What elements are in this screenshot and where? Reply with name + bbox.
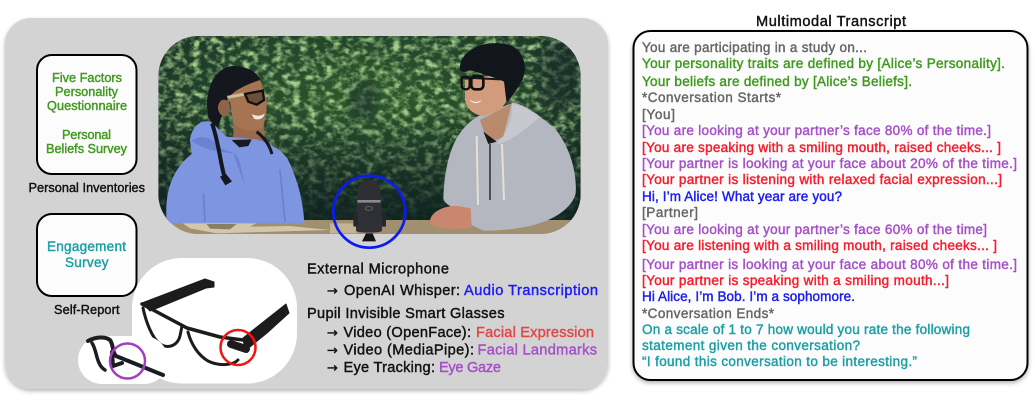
transcript: partner turn: [Your partner is looking at your face about 80% of the time.] (642, 257, 1017, 272)
transcript: your turn: [Your partner is looking at your face about 20% of the time.] (642, 156, 1017, 171)
pupil invisible smart glasses: Eye Tracking: (344, 360, 435, 376)
external microphone: External Microphone (307, 262, 449, 278)
transcript: partner turn: [You are listening with a smiling mouth, raised cheeks... ] (642, 238, 997, 253)
person: left, blue hoodie (166, 66, 304, 223)
transcript: your turn: [You are looking at your partner’s face 80% of the time.] (642, 123, 991, 138)
box: personal inventories: Questionnaire (47, 99, 127, 113)
transcript: partner turn: [Partner] (642, 205, 698, 220)
transcript: partner turn (642, 205, 1017, 304)
panel: multimodal transcript (634, 31, 1028, 380)
glasses frame (142, 279, 289, 365)
transcript: your turn (642, 107, 1017, 204)
transcript: survey question: On a scale of 1 to 7 how would you rate the following (642, 322, 970, 337)
panel: data collection (5, 18, 608, 389)
transcript: your turn: [You are speaking with a smiling mouth, raised cheeks... ] (642, 140, 1001, 155)
pupil invisible smart glasses: → (327, 344, 338, 358)
icon: microphone (353, 180, 386, 241)
transcript: survey question: “I found this conversation to be interesting.” (642, 354, 917, 369)
box: engagement survey (37, 214, 136, 296)
person: right, grey hoodie (430, 43, 576, 231)
transcript: system prompt: You are participating in a study on... (642, 40, 867, 55)
pupil invisible smart glasses: Eye Gaze (439, 360, 501, 376)
box: personal inventories: Beliefs Survey (46, 142, 128, 156)
transcript: your turn: Hi, I’m Alice! What year are you? (642, 189, 842, 204)
external microphone: Audio Transcription (464, 283, 598, 299)
transcript: your turn: [Your partner is listening with relaxed facial expression...] (642, 172, 1002, 187)
pupil invisible smart glasses (307, 306, 597, 376)
box: personal inventories: Five Factors (52, 71, 122, 85)
external microphone: OpenAI Whisper: (344, 283, 460, 299)
photo: two participants talking (158, 36, 583, 248)
transcript: survey question (642, 306, 970, 369)
pupil invisible smart glasses: → (327, 326, 338, 341)
box: personal inventories: Personal (62, 128, 111, 142)
pupil invisible smart glasses: → (327, 361, 338, 376)
heading: multimodal transcript: Multimodal Transcript (756, 14, 906, 30)
image: eye tracking close-up (78, 336, 168, 384)
external microphone (307, 262, 598, 299)
transcript: your turn: [You] (642, 107, 675, 122)
image: smart glasses (132, 258, 297, 384)
pupil invisible smart glasses: Facial Landmarks (478, 342, 597, 358)
wooden table (158, 220, 581, 234)
box: engagement survey: Survey (65, 255, 109, 270)
transcript: survey question: *Conversation Ends* (642, 306, 775, 321)
label: personal inventories: Personal Inventories (28, 181, 145, 195)
pupil invisible smart glasses: Facial Expression (476, 325, 594, 341)
box: personal inventories: Personality (55, 85, 119, 99)
pupil invisible smart glasses: Pupil Invisible Smart Glasses (307, 306, 504, 322)
transcript: partner turn: Hi Alice, I’m Bob. I’m a sophomore. (642, 289, 855, 304)
pupil invisible smart glasses: Video (OpenFace): (344, 325, 471, 341)
transcript: partner turn: [You are looking at your partner’s face 60% of the time] (642, 222, 987, 237)
marker: blue circle around microphone (333, 176, 405, 248)
hedge background (158, 36, 583, 223)
external microphone: → (327, 284, 338, 299)
box: engagement survey: Engagement (47, 239, 126, 254)
transcript: survey question: statement given the conversation? (642, 338, 860, 353)
label: self-report: Self-Report (54, 303, 120, 317)
transcript: system prompt (642, 40, 1005, 105)
marker: purple circle around eye camera (110, 344, 145, 378)
legend: sensors and models (307, 262, 598, 376)
transcript: partner turn: [Your partner is speaking with a smiling mouth...] (642, 273, 949, 288)
box: personal inventories (37, 55, 136, 174)
transcript: system prompt: Your beliefs are defined by [Alice’s Beliefs]. (642, 74, 912, 89)
marker: red circle around scene camera (220, 330, 256, 365)
transcript: system prompt: *Conversation Starts* (642, 90, 782, 105)
pupil invisible smart glasses: Video (MediaPipe): (344, 342, 474, 358)
transcript: system prompt: Your personality traits are defined by [Alice’s Personality]. (642, 56, 1005, 71)
